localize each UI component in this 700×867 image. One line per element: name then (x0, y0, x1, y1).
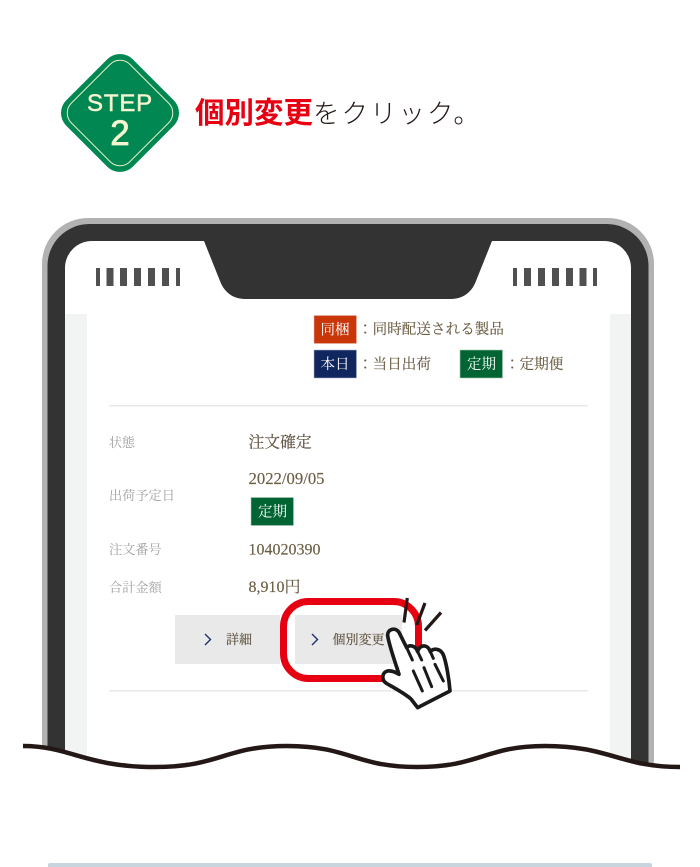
order details (109, 434, 325, 596)
click sparks (404, 598, 441, 630)
value: 注文確定: 注文確定 (248, 434, 312, 452)
notch (204, 241, 492, 299)
legend text: 本日: ：当日出荷 (358, 355, 431, 373)
button: 詳細 (175, 615, 280, 664)
value: total: 8,910円 (248, 578, 301, 596)
bottom bar (48, 863, 652, 867)
badge: 定期 (460, 350, 502, 378)
wave cut line (23, 746, 680, 767)
button: 個別変更 (295, 615, 402, 664)
legend text: 同梱: ：同時配送される製品 (358, 320, 504, 338)
badge: 同梱 (314, 316, 356, 344)
label: 合計金額: 合計金額 (109, 580, 163, 595)
badge: 本日: 本日 (320, 356, 350, 373)
title: 個別変更をクリック。 (195, 97, 482, 130)
signal bars left (96, 268, 180, 286)
icon: pointing hand (383, 629, 450, 708)
value: order number: 104020390 (248, 542, 320, 558)
label: 注文番号: 注文番号 (109, 541, 162, 557)
badge: 同梱: 同梱 (320, 322, 350, 338)
label: 出荷予定日: 出荷予定日 (109, 487, 175, 503)
step badge: 2 (110, 114, 130, 153)
badge: 定期: 定期 (467, 356, 496, 373)
red highlight (284, 602, 418, 678)
white cover below wave (23, 746, 682, 862)
legend (314, 316, 564, 378)
finger lines (407, 648, 443, 691)
badge: 定期: 定期 (258, 504, 287, 520)
right sidebar (610, 314, 631, 794)
phone frame (42, 218, 654, 800)
value: date: 2022/09/05 (248, 469, 325, 488)
left sidebar (65, 314, 87, 794)
step badge (54, 47, 186, 179)
label: 状態: 状態 (109, 435, 136, 450)
badge: 定期 (251, 498, 294, 526)
button: 個別変更: 個別変更 (332, 632, 385, 647)
badge: 本日 (314, 350, 356, 378)
step badge: STEP (87, 90, 153, 117)
button: 詳細: 詳細 (226, 632, 252, 647)
phone screen (65, 241, 631, 800)
signal bars right (513, 268, 597, 286)
legend text: 定期: ：定期便 (505, 356, 564, 373)
